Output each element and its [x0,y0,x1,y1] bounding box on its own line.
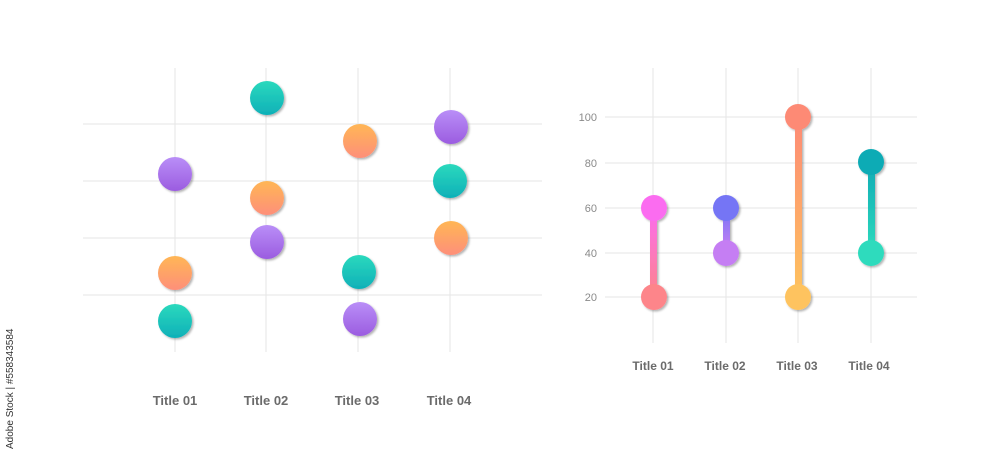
y-axis labels: 80 [585,158,597,170]
dots: Title 03 [342,124,377,336]
right x-axis labels: Title 01 [632,359,674,373]
left x-axis labels: Title 03 [335,393,379,408]
right x-axis labels: Title 03 [776,359,818,373]
right x-axis labels [632,359,890,373]
stock id text: Adobe Stock | #558343584 [5,328,16,449]
y-axis labels [579,112,597,304]
y-axis labels: 100 [579,112,597,124]
dots: Title 01 [158,157,192,338]
range bar: Title 02 [713,195,739,266]
dots: Title 04 [433,110,468,255]
panel: right range chart [579,68,917,373]
range bar: Title 04 [858,149,884,266]
y-axis labels: 60 [585,203,597,215]
dots: Title 02 [250,81,284,259]
left x-axis labels: Title 04 [427,393,472,408]
range bar: Title 03 [785,104,811,310]
y-axis labels: 40 [585,248,597,260]
left x-axis labels [153,393,472,408]
right x-axis labels: Title 04 [848,359,890,373]
right x-axis labels: Title 02 [704,359,746,373]
y-axis labels: 20 [585,292,597,304]
left x-axis labels: Title 02 [244,393,288,408]
panel: left dot chart [83,68,542,408]
left x-axis labels: Title 01 [153,393,197,408]
range bar: Title 01 [641,195,667,310]
